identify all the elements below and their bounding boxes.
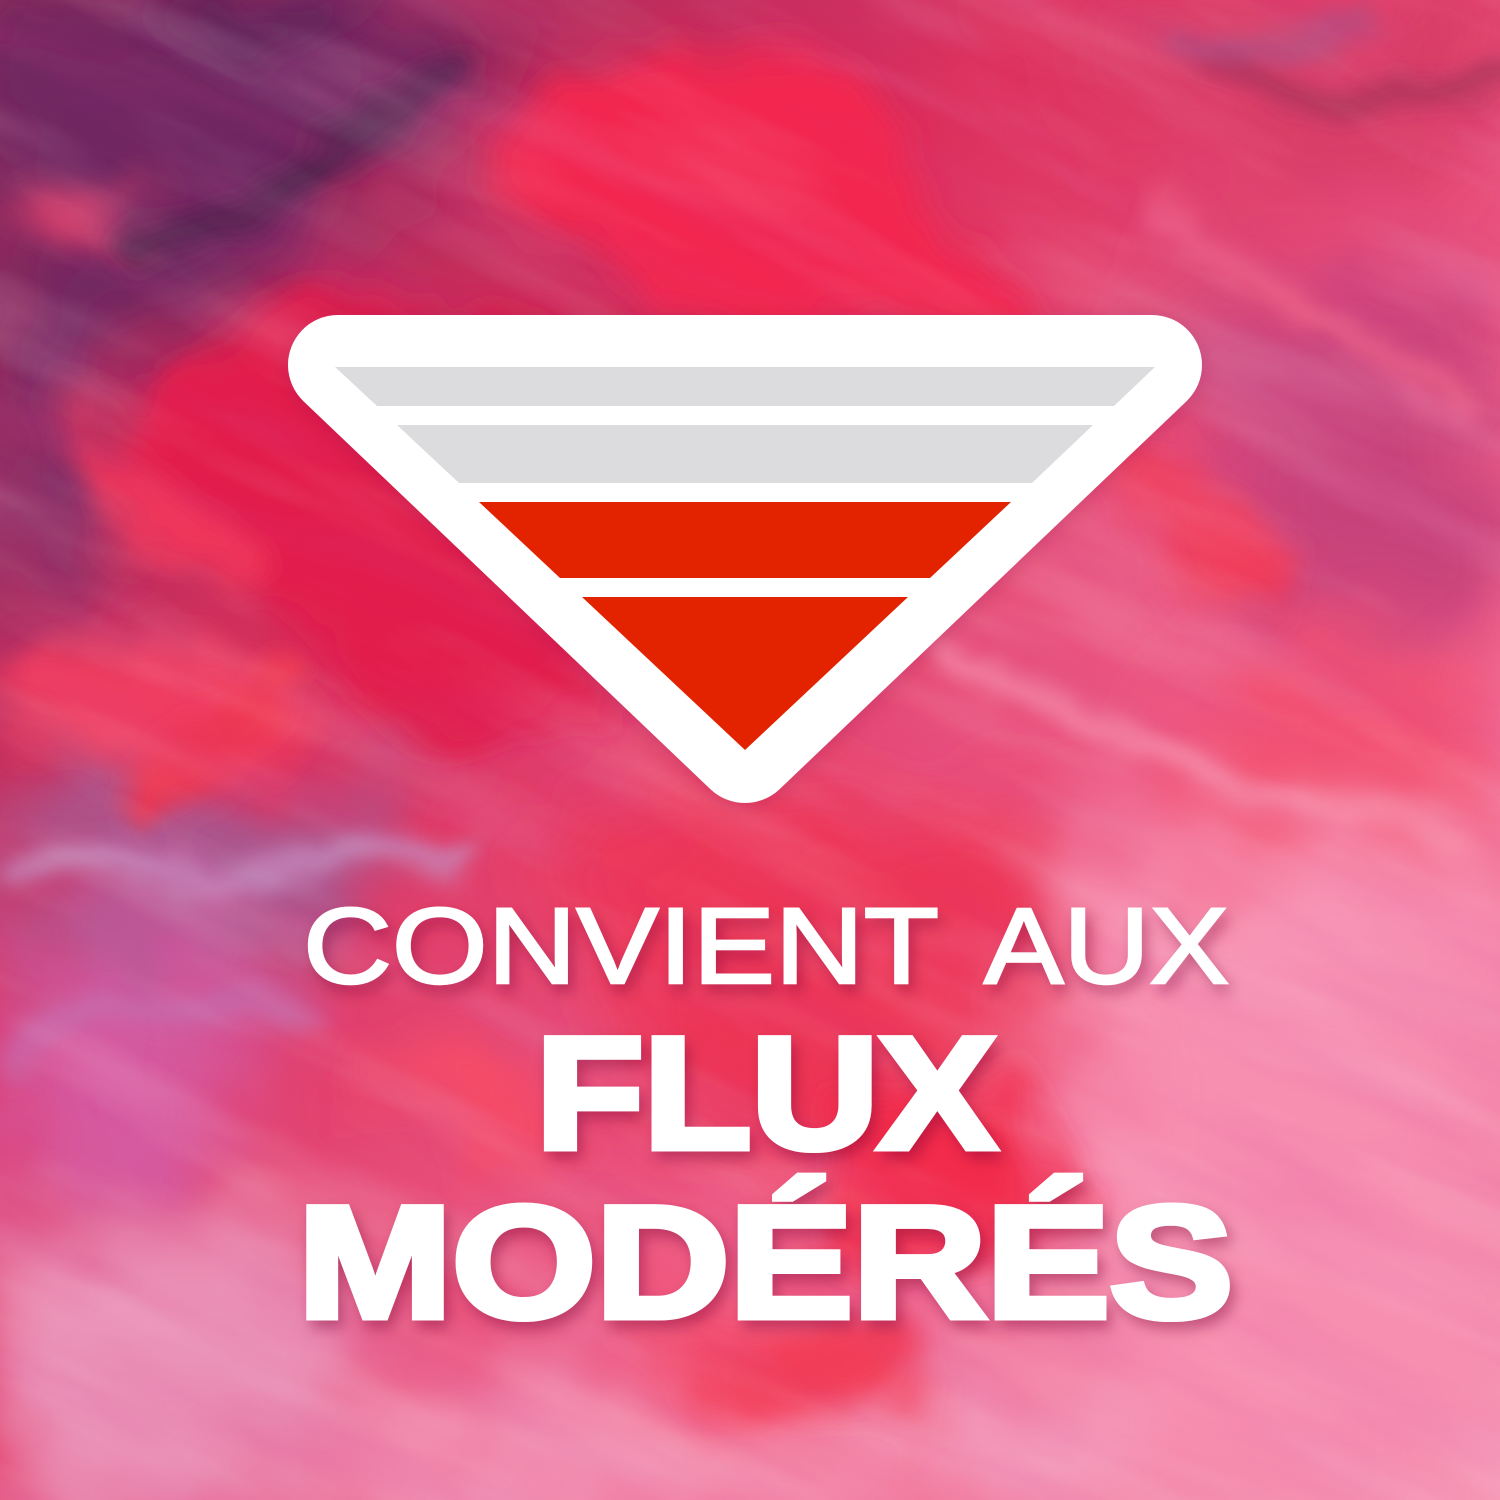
band 1: grey	[335, 367, 1155, 406]
band 4: red	[582, 597, 908, 750]
logo: flow indicator triangle	[335, 365, 1155, 753]
logo outline: white rounded triangle	[338, 365, 1152, 753]
band 3: red	[479, 502, 1011, 578]
heading: convient aux: CONVIENT	[303, 885, 939, 1006]
smoke wisps	[750, 750, 751, 751]
heading: convient aux	[303, 885, 1229, 1006]
heading: flux: FLUX	[536, 1004, 996, 1182]
band 2: grey	[397, 425, 1093, 483]
heading: modérés: MODÉRÉS	[298, 1173, 1233, 1351]
heading: convient aux: AUX	[984, 885, 1229, 1006]
